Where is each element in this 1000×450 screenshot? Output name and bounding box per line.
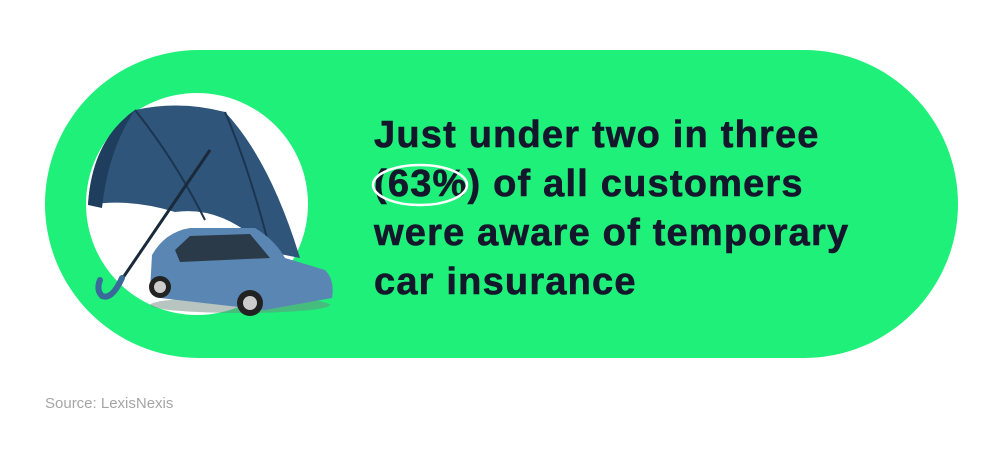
text block: headline (372, 114, 849, 303)
icon: white circle (86, 93, 308, 315)
panel: green pill (45, 50, 958, 358)
text block: headline: were aware of temporary (374, 212, 849, 254)
icon: umbrella (88, 105, 300, 297)
text block: headline: (63%) of all customers (374, 163, 804, 205)
text block: headline: car insurance (374, 261, 637, 303)
illustration: umbrella over car (86, 93, 333, 316)
text block: headline: Just under two in three (374, 114, 820, 156)
icon: car (149, 228, 333, 316)
source: Source: LexisNexis (45, 395, 173, 412)
